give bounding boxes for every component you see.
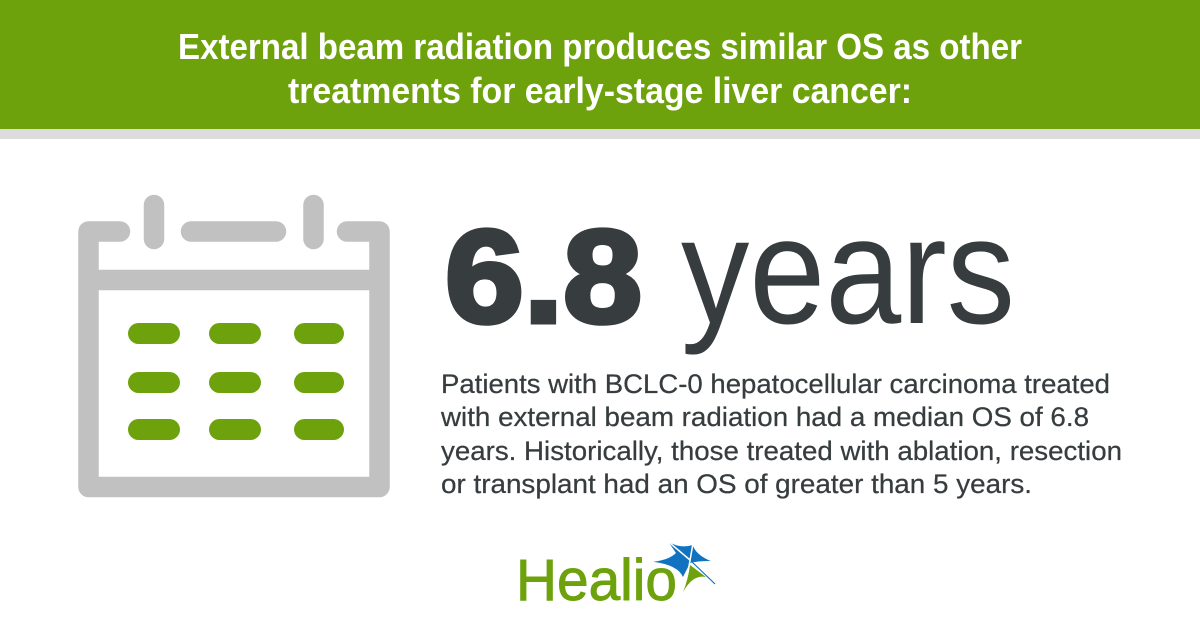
title: External beam radiation produces similar OS as other: [178, 26, 1022, 67]
big statistic: 6.8: [445, 203, 642, 350]
icon: logo star: [653, 542, 715, 592]
description text: Patients with BCLC-0 hepatocellular carcinoma treated: [441, 369, 1110, 399]
description text: with external beam radiation had a median OS of 6.8: [440, 402, 1089, 432]
big statistic: [445, 186, 1015, 356]
icon: calendar: [88, 205, 380, 487]
description text: [440, 369, 1122, 499]
description text: years. Historically, those treated with ablation, resection: [441, 436, 1122, 466]
Healio logo: Healio: [516, 548, 677, 613]
big statistic: years: [681, 186, 1015, 356]
header banner: [0, 0, 1200, 139]
title: treatments for early-stage liver cancer:: [288, 70, 912, 111]
description text: or transplant had an OS of greater than 5 years.: [441, 469, 1032, 499]
title: [178, 26, 1022, 111]
